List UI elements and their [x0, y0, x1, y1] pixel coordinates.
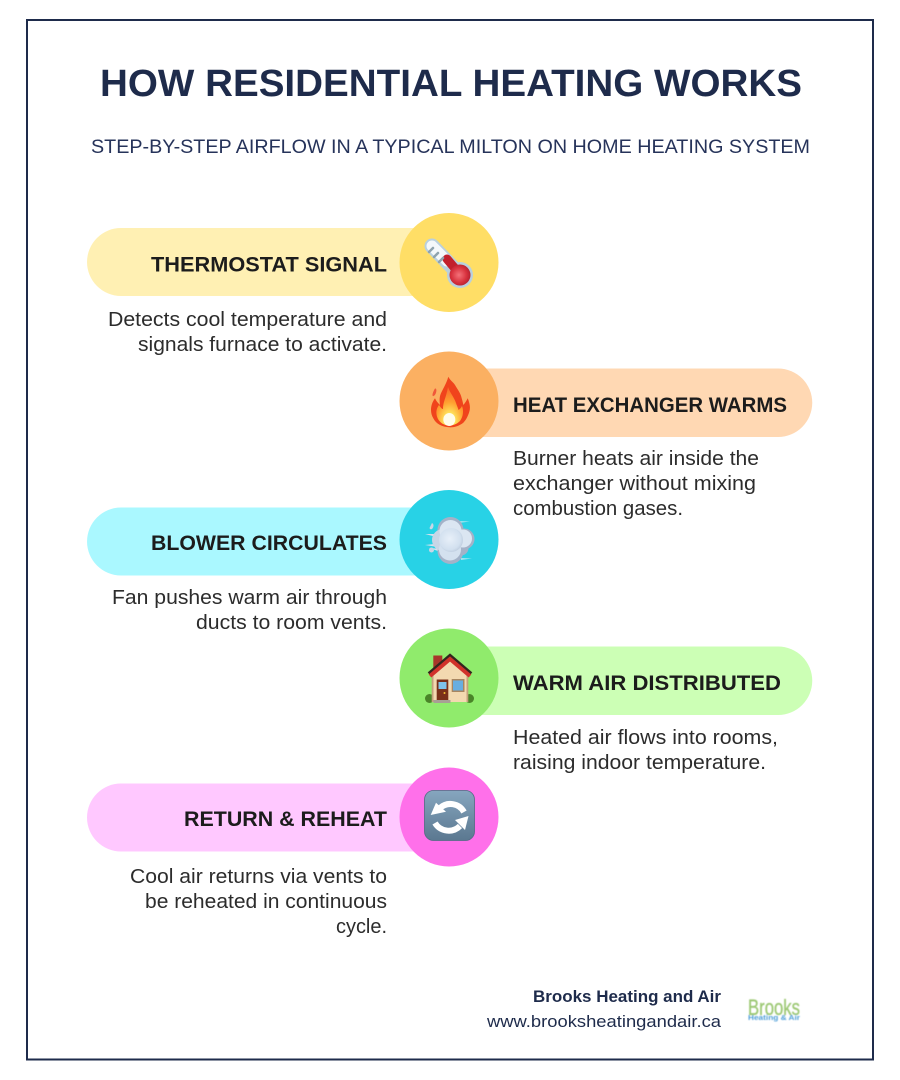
step 1 description	[108, 309, 387, 356]
icon: refresh arrows	[424, 790, 474, 840]
step 2 pill	[460, 368, 812, 437]
step 4 description	[513, 727, 778, 774]
subtitle: STEP-BY-STEP AIRFLOW IN A TYPICAL MILTON ON HOME HEATING SYSTEM	[91, 136, 810, 158]
step 4 heading: WARM AIR DISTRIBUTED	[513, 672, 781, 695]
step 3 icon circle	[400, 490, 498, 589]
step 3: blower circulates	[87, 490, 498, 634]
step 3 description: ducts to room vents.	[196, 612, 387, 634]
step 1 icon circle	[400, 213, 498, 312]
step 3 heading: BLOWER CIRCULATES	[151, 532, 387, 555]
step 1 description: signals furnace to activate.	[138, 334, 387, 356]
step 3 description	[112, 587, 387, 634]
icon: flame	[431, 377, 470, 427]
title: HOW RESIDENTIAL HEATING WORKS	[100, 63, 802, 105]
logo: Heating & Air	[748, 1015, 800, 1022]
footer website: www.brooksheatingandair.ca	[486, 1012, 722, 1031]
step 4: warm air distributed	[400, 628, 812, 774]
icon: house	[425, 656, 474, 703]
icon: thermometer	[429, 246, 473, 288]
step 2 heading: HEAT EXCHANGER WARMS	[513, 394, 787, 417]
step 2 description: Burner heats air inside the	[513, 448, 759, 470]
step 5 pill	[87, 784, 440, 852]
step 4 description: Heated air flows into rooms,	[513, 727, 778, 749]
step 1 description: Detects cool temperature and	[108, 309, 387, 331]
logo: Brooks	[748, 995, 800, 1020]
icon: wind puff	[425, 517, 474, 564]
step 5 description: Cool air returns via vents to	[130, 866, 387, 888]
step 5: return and reheat	[87, 768, 498, 938]
step 1 pill	[87, 228, 440, 296]
step 5 description: cycle.	[336, 916, 387, 938]
step 1: thermostat signal	[87, 213, 499, 356]
footer company name: Brooks Heating and Air	[533, 987, 721, 1006]
step 4 icon circle	[400, 628, 498, 728]
step 2 description: combustion gases.	[513, 498, 683, 520]
step 2 description	[513, 448, 759, 520]
step 5 description: be reheated in continuous	[145, 891, 387, 913]
step 3 pill	[87, 508, 440, 576]
step 1 heading: THERMOSTAT SIGNAL	[151, 254, 387, 276]
step 5 heading: RETURN & REHEAT	[184, 808, 387, 831]
step 2 description: exchanger without mixing	[513, 473, 756, 495]
step 3 description: Fan pushes warm air through	[112, 587, 387, 609]
step 4 pill	[460, 646, 812, 715]
step 5 description	[130, 866, 387, 938]
step 5 icon circle	[400, 768, 498, 866]
step 4 description: raising indoor temperature.	[513, 752, 766, 774]
step 2 icon circle	[400, 352, 498, 450]
step 2: heat exchanger warms	[400, 352, 812, 520]
